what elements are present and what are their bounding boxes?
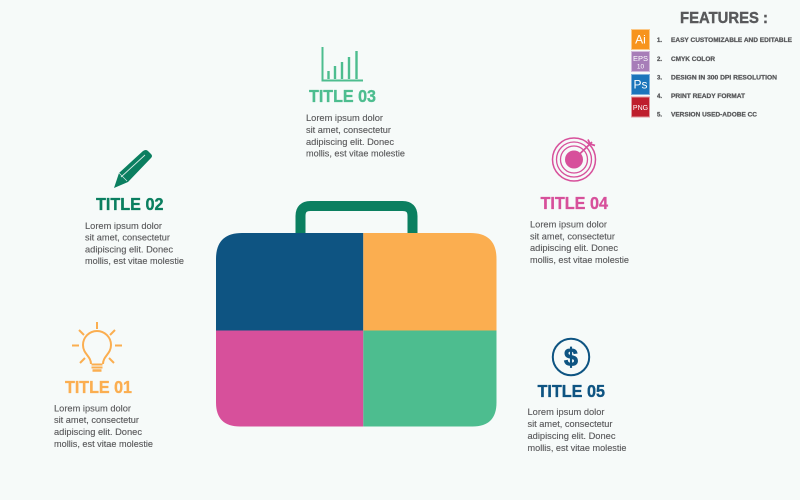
- text: title 05 body: Lorem ipsum dolor: [528, 407, 604, 417]
- icon: Ps badge: Ps: [633, 78, 648, 92]
- block: title 03: [306, 47, 405, 158]
- text: feature 4: 4.: [657, 94, 662, 100]
- text: feature 2: CMYK COLOR: [671, 57, 716, 63]
- text: title 04 body: sit amet, consectetur: [530, 232, 615, 242]
- text: feature 1: 1.: [657, 38, 662, 44]
- icon: PNG badge: [632, 97, 650, 117]
- icon: EPS badge: [632, 52, 650, 72]
- icon: EPS badge: 10: [637, 64, 644, 70]
- text: feature 5: 5.: [657, 112, 662, 118]
- icon: bar chart: [322, 47, 363, 80]
- heading: features: FEATURES :: [680, 10, 768, 27]
- text: feature 1: EASY CUSTOMIZABLE AND EDITABLE: [671, 38, 792, 44]
- text: title 04 body: Lorem ipsum dolor: [530, 220, 607, 230]
- heading: title 05: TITLE 05: [538, 381, 605, 401]
- text: title 05 body: mollis, est vitae molestie: [528, 443, 626, 453]
- icon: pencil: [114, 150, 152, 188]
- briefcase quadrant: navy: [216, 233, 363, 330]
- icon: dollar coin: $: [564, 344, 578, 372]
- text: title 03 body: sit amet, consectetur: [306, 125, 391, 135]
- text: feature 4: PRINT READY FORMAT: [671, 94, 745, 100]
- text: title 03 body: adipiscing elit. Donec: [306, 137, 394, 147]
- heading: title 02: TITLE 02: [96, 194, 164, 214]
- text: title 02 body: adipiscing elit. Donec: [85, 244, 173, 254]
- block: title 01: [54, 322, 153, 449]
- text: title 04 body: adipiscing elit. Donec: [530, 243, 618, 253]
- icon: light bulb: [72, 322, 122, 370]
- block: title 05: [528, 339, 626, 453]
- icon: EPS badge: EPS: [633, 54, 648, 63]
- text: feature 3: DESIGN IN 300 DPI RESOLUTION: [671, 76, 777, 82]
- icon: target: [552, 138, 596, 181]
- heading: title 04: TITLE 04: [540, 193, 608, 213]
- panel: features: [632, 10, 792, 118]
- briefcase handle: [300, 206, 412, 233]
- text: title 01 body: Lorem ipsum dolor: [54, 404, 131, 414]
- block: title 02: [85, 150, 184, 266]
- icon: Ai badge: [632, 30, 650, 50]
- briefcase quadrant: orange: [363, 233, 496, 330]
- block: title 04: [530, 138, 629, 265]
- icon: PNG badge: PNG: [633, 105, 648, 112]
- text: feature 2: 2.: [657, 57, 662, 63]
- icon: Ps badge: [632, 74, 650, 94]
- text: title 02 body: Lorem ipsum dolor: [85, 221, 162, 231]
- heading: title 01: TITLE 01: [65, 377, 132, 397]
- briefcase quadrant: pink: [216, 330, 363, 426]
- text: feature 3: 3.: [657, 76, 662, 82]
- text: title 03 body: Lorem ipsum dolor: [306, 113, 383, 123]
- heading: title 03: TITLE 03: [309, 86, 376, 106]
- briefcase quadrant: green: [363, 330, 496, 426]
- text: title 03 body: mollis, est vitae molestie: [306, 148, 405, 158]
- text: title 05 body: sit amet, consectetur: [528, 419, 612, 429]
- text: feature 5: VERSION USED-ADOBE CC: [671, 112, 758, 118]
- text: title 02 body: sit amet, consectetur: [85, 232, 170, 242]
- text: title 01 body: sit amet, consectetur: [54, 415, 139, 425]
- briefcase: [216, 206, 496, 426]
- text: title 01 body: mollis, est vitae molestie: [54, 439, 153, 449]
- text: title 04 body: mollis, est vitae molestie: [530, 255, 629, 265]
- icon: Ai badge: Ai: [635, 32, 646, 46]
- text: title 05 body: adipiscing elit. Donec: [528, 431, 616, 441]
- text: title 01 body: adipiscing elit. Donec: [54, 427, 142, 437]
- text: title 02 body: mollis, est vitae molestie: [85, 256, 184, 266]
